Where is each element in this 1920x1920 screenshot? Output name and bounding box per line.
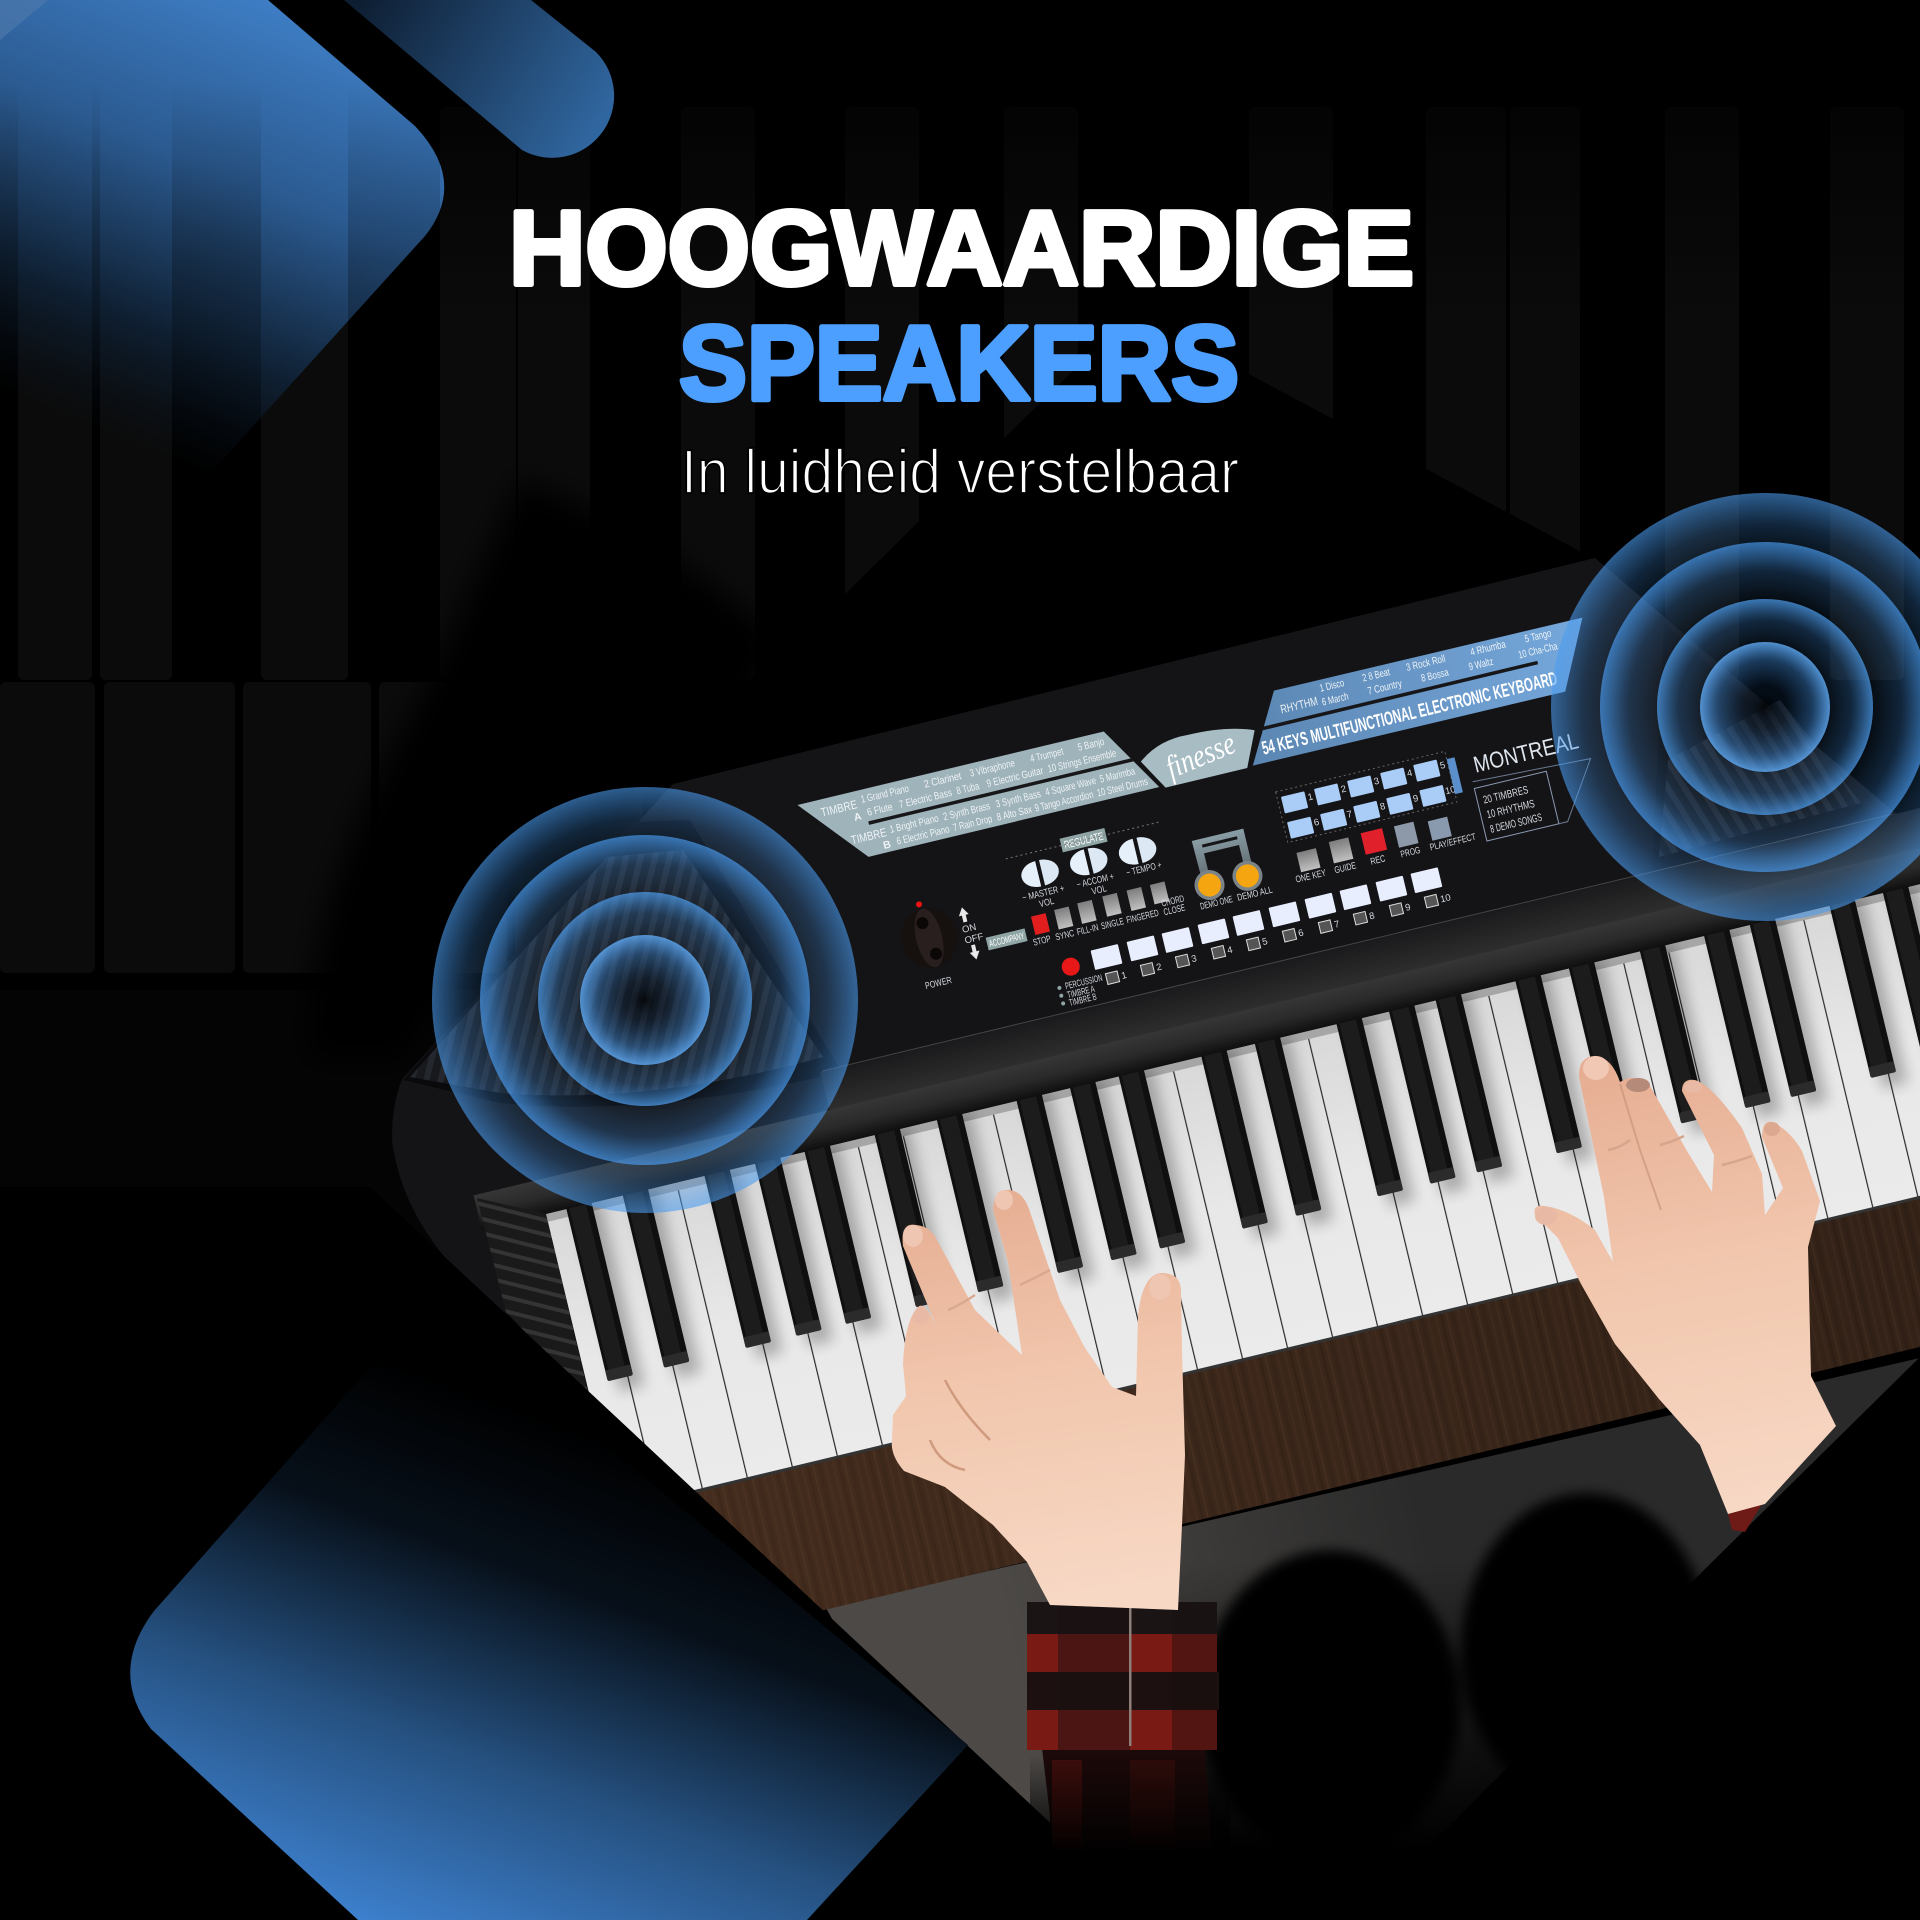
surface fade to black: [1050, 1560, 1920, 1850]
sleeve: left plaid cuff: [1027, 1602, 1219, 1900]
banner: rhythm list: 1 Disco: [1318, 677, 1346, 695]
subtitle: In luidheid verstelbaar: [681, 438, 1239, 507]
numbered rhythm buttons: 4: [1406, 768, 1414, 780]
numbered rhythm buttons: 5: [1439, 760, 1447, 772]
numbered rhythm buttons: 3: [1373, 776, 1381, 788]
banner: timbre list: A: [853, 810, 863, 824]
mask: bottom-left diagonal: [0, 1187, 1060, 1920]
banner: timbre list: 2 Synth Brass: [942, 800, 991, 823]
banner: timbre list: 3 Vibraphone: [969, 757, 1016, 780]
banner: rhythm list: 7 Country: [1366, 678, 1404, 698]
timbre buttons row: 9: [1404, 902, 1412, 914]
demo music note: DEMO ONE: [1199, 894, 1234, 913]
title: [509, 190, 1414, 422]
banner: timbre list: 5 Banjo: [1076, 736, 1106, 754]
function buttons: [1289, 807, 1477, 886]
numbered rhythm buttons: 7: [1346, 809, 1354, 821]
title line 2: SPEAKERS: [679, 304, 1239, 422]
shape: ghost key gaps over blue: [0, 80, 440, 540]
timbre buttons row: 4: [1226, 945, 1234, 956]
banner: timbre list: TIMBRE: [850, 825, 888, 847]
banner: rhythm list: 4 Rhumba: [1469, 638, 1507, 659]
background: dark diamond behind the keyboard: [640, 312, 1920, 1000]
power switch: OFF: [964, 931, 985, 947]
left hand: [892, 1190, 1185, 1610]
regulate controls: VOL: [1038, 896, 1055, 910]
numbered rhythm buttons: 9: [1412, 793, 1420, 805]
banner: rhythm list: 3 Rock Roll: [1405, 653, 1447, 674]
timbre buttons row: 10: [1439, 892, 1452, 905]
surface below the keyboard: [826, 1358, 1920, 1920]
banner: timbre list: 7 Rain Drop: [952, 813, 994, 834]
accompany buttons: SINGLE: [1100, 916, 1125, 932]
surface bottom black: [1050, 1850, 1920, 1920]
power switch: ON: [961, 922, 978, 936]
right hand: [1534, 1056, 1836, 1514]
banner: rhythm list: 8 Bossa: [1420, 666, 1450, 685]
accompany buttons: FILL-IN: [1076, 922, 1100, 938]
banner: rhythm list: 54 KEYS MULTIFUNCTIONAL ELECTRONIC KEYBOARD: [1260, 668, 1559, 760]
regulate controls: − TEMPO +: [1125, 860, 1163, 879]
black keys: [565, 871, 1920, 1381]
demo music note: DEMO ALL: [1236, 885, 1274, 904]
banner: timbre list: 2 Clarinet: [923, 770, 963, 791]
accompany buttons: STOP: [1032, 934, 1052, 949]
sleeve fade: [1030, 1755, 1230, 1855]
banner: timbre list: 5 Marimba: [1099, 765, 1136, 786]
banner: timbre list: 1 Grand Piano: [860, 783, 910, 806]
banner: timbre list: 3 Synth Bass: [994, 788, 1042, 811]
accompany buttons: SYNC: [1054, 928, 1075, 943]
timbre buttons row: 3: [1190, 953, 1198, 965]
banner: timbre list: 4 Square Wave: [1044, 775, 1098, 799]
wood base: [617, 1160, 1920, 1652]
power switch: [893, 889, 993, 995]
background: ghost piano keys upper row: [18, 107, 1904, 680]
timbre buttons row: 8: [1368, 910, 1376, 922]
regulate controls: VOL: [1091, 883, 1108, 898]
banner: rhythm list: 10 Cha-Cha: [1517, 640, 1559, 661]
timbre buttons row: TIMBRE A: [1066, 984, 1096, 1001]
front strip: [464, 768, 1920, 1229]
accompany buttons: [983, 878, 1188, 960]
black key shadows: [575, 873, 1920, 1392]
left speaker: [403, 820, 842, 1107]
sound waves: left speaker: [432, 787, 858, 1213]
shape: top-left blue rounded diamond: [0, 0, 444, 540]
logo badge: finesse: [1137, 718, 1263, 792]
background: blurred silhouette of player: [309, 480, 780, 1060]
timbre buttons row: [1051, 866, 1455, 1011]
banner: timbre list: 9 Electric Guitar: [985, 765, 1045, 790]
model name and features box: MONTREAL: [1471, 727, 1581, 778]
white keys: [546, 864, 1920, 1512]
banner: rhythm list: 5 Tango: [1524, 627, 1553, 645]
accompany buttons: FINGERED: [1125, 908, 1160, 926]
banner: rhythm list: [1237, 617, 1598, 767]
demo music note: [1184, 825, 1274, 913]
model name and features box: 20 TIMBRES: [1482, 784, 1530, 807]
banner: timbre list: 8 Tuba: [955, 780, 981, 797]
background: ghost piano keys lower row: [0, 682, 643, 1340]
banner: timbre list: 6 Flute: [866, 801, 894, 819]
logo badge: finesse: finesse: [1160, 724, 1240, 785]
model name and features box: 8 DEMO SONGS: [1489, 812, 1543, 836]
timbre buttons row: 7: [1333, 919, 1341, 931]
banner: timbre list: 7 Electric Bass: [898, 787, 953, 811]
banner: timbre list: B: [882, 838, 893, 852]
banner: timbre list: TIMBRE: [819, 797, 859, 820]
function buttons: PLAY/EFFECT: [1429, 832, 1477, 853]
timbre buttons row: 1: [1120, 970, 1128, 982]
numbered rhythm buttons: [1276, 750, 1465, 843]
numbered rhythm buttons: 2: [1340, 784, 1347, 796]
accompany buttons: CHORD: [1160, 893, 1185, 910]
banner: rhythm list: 2 8 Beat: [1361, 666, 1391, 684]
mask: bottom-right diagonal: [1356, 1357, 1920, 1920]
numbered rhythm buttons: 8: [1379, 801, 1387, 813]
sleeve bottom mask: [1030, 1855, 1230, 1920]
timbre buttons row: 5: [1261, 936, 1269, 948]
banner: timbre list: 10 Steel Drums: [1096, 776, 1149, 800]
knee shadows: [1200, 1493, 1711, 1860]
numbered rhythm buttons: 1: [1307, 792, 1314, 803]
banner: timbre list: 10 Strings Ensemble: [1047, 747, 1118, 775]
timbre buttons row: 6: [1297, 928, 1305, 939]
banner: rhythm list: 6 March: [1321, 691, 1350, 709]
regulate controls: REGULATE: [1063, 831, 1105, 852]
banner: timbre list: 9 Tango Accordion: [1033, 789, 1095, 815]
right speaker: [1652, 623, 1920, 875]
accompany buttons: CLOSE: [1163, 902, 1186, 918]
shape: bottom blue rounded diamond: [130, 1300, 968, 1920]
title line 1: HOOGWAARDIGE: [509, 190, 1414, 308]
banner: rhythm list: RHYTHM: [1279, 694, 1319, 716]
timbre buttons row: TIMBRE B: [1068, 992, 1098, 1009]
banner: timbre list: [797, 722, 1159, 870]
keyboard end vents: [477, 1198, 590, 1400]
shape: top-left corner highlight: [0, 0, 48, 40]
power switch: POWER: [924, 975, 953, 992]
keyboard body: [392, 558, 1920, 1345]
regulate controls: [1004, 815, 1175, 915]
function buttons: PROG: [1400, 845, 1422, 860]
regulate controls: − ACCOM +: [1076, 871, 1116, 891]
timbre buttons row: 2: [1155, 962, 1163, 974]
banner: timbre list: 8 Alto Sax: [996, 803, 1034, 824]
accompany buttons: ACCOMPANY: [988, 931, 1026, 950]
function buttons: REC: [1369, 853, 1387, 868]
banner: rhythm list: 9 Waltz: [1468, 656, 1495, 673]
numbered rhythm buttons: 6: [1313, 817, 1320, 829]
numbered rhythm buttons: 10: [1444, 784, 1457, 797]
sound waves: right speaker: [1551, 493, 1920, 921]
banner: timbre list: 1 Bright Piano: [888, 813, 940, 836]
timbre buttons row: PERCUSSION: [1064, 973, 1104, 992]
banner: timbre list: 6 Electric Piano: [895, 823, 951, 848]
model name and features box: 10 RHYTHMS: [1486, 798, 1536, 821]
banner: timbre list: 4 Trumpet: [1029, 746, 1065, 765]
keyboard: rotated keys and control panel: [403, 511, 1920, 1667]
function buttons: ONE KEY: [1295, 868, 1328, 886]
regulate controls: − MASTER +: [1021, 883, 1066, 904]
model name and features box: [1466, 726, 1604, 841]
function buttons: GUIDE: [1333, 860, 1357, 876]
shape: top blue pill: [344, 0, 614, 158]
sleeve: right wrist: [1728, 1504, 1762, 1532]
